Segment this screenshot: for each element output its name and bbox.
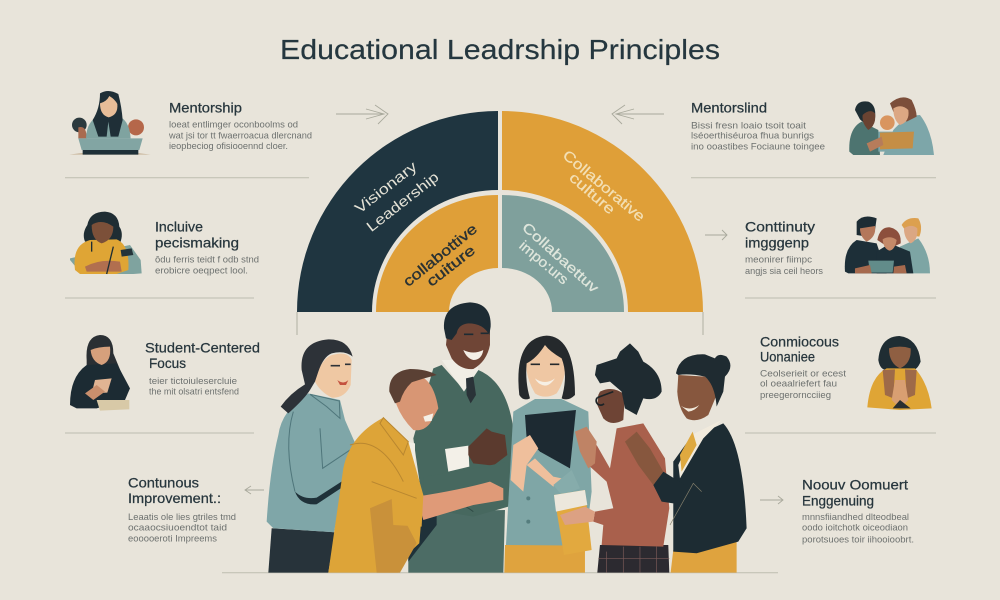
label: collaborative culture inner: collabottive — [401, 221, 481, 290]
text block: conmiocous: Uonaniee — [760, 349, 815, 365]
text block: engagement: mnnsfiiandhed dlteodbeal — [802, 512, 909, 523]
text block: inclusive decision making: Incluive — [155, 219, 203, 235]
text block: inclusive decision making: pecismaking — [155, 235, 239, 251]
figure: woman holding black folder — [504, 336, 592, 573]
figure: man in mustard shirt — [328, 369, 503, 573]
text block: mentorship left: loeat entlimger oconboolms od — [169, 120, 298, 130]
text block: mentorship right: Bissi fresn loaio tsoit toait — [691, 121, 806, 132]
text block: continuous improvement — [128, 475, 236, 545]
text block: conmiocous: Conmiocous — [760, 333, 839, 349]
text block: mentorship left — [168, 100, 312, 152]
arrow: continuity — [705, 230, 727, 240]
text block: continuous improvement: eooooeroti Impreems — [128, 534, 217, 545]
text block: mentorship left: Mentorship — [169, 100, 242, 116]
icon: woman in yellow shirt — [70, 212, 142, 274]
label: collaborative culture outer: Collaborative — [559, 148, 648, 225]
semicircle diagram — [297, 111, 703, 312]
text block: engagement: porotsuoes toir iihooioobrt. — [802, 535, 914, 546]
text block: student-centered focus: teier tictoiulesercluie — [149, 376, 237, 387]
text block: inclusive decision making — [155, 219, 259, 276]
text block: continuous improvement: Leaatis ole lies gtriles tmd — [128, 512, 236, 523]
text block: student-centered focus: the mit olsatri entsfend — [149, 387, 239, 398]
arrow: engagement — [760, 496, 783, 504]
label: collaborative culture inner: cuiture — [424, 243, 479, 290]
text block: continuous improvement: ocaaocsiuoendtot taid — [128, 523, 227, 534]
figure: woman in teal shirt — [267, 339, 357, 573]
figure: person in black jacket — [625, 354, 747, 573]
label: collaborative culture inner — [401, 221, 481, 290]
icon: student with notebook — [70, 335, 130, 411]
figure: tall man in green sweater — [408, 302, 513, 573]
title: Educational Leadrship Principles — [280, 34, 720, 65]
arrow: top left — [336, 105, 388, 124]
segment: collaborative culture inner — [376, 195, 498, 312]
text block: mentorship left: ieopbeciog ofisiooennd cloer. — [169, 141, 288, 152]
icon: group with book — [849, 97, 934, 155]
text block: inclusive decision making: erobicre oeqpect lool. — [155, 265, 248, 276]
text block: engagement: Noouv Oomuert — [802, 476, 908, 492]
text block: engagement: oodo ioitchotk oiceodiaon — [802, 523, 908, 534]
text block: engagement: Enggenuing — [802, 492, 874, 508]
label: visionary leadership: Leadership — [364, 169, 442, 236]
text block: continuity: Conttinuty — [745, 219, 815, 235]
text block: engagement — [802, 476, 914, 546]
text block: conmiocous: ol oeaalriefert fau — [760, 379, 837, 390]
icon: three people with tablet — [845, 216, 930, 273]
text block: continuity — [745, 219, 823, 277]
label: collaborative impact inner: Collabaettuv — [519, 219, 602, 296]
text block: mentorship right: Mentorslind — [691, 99, 767, 115]
arrow: continuous improvement — [245, 486, 264, 494]
segment: collaborative culture outer — [502, 111, 703, 312]
text block: student-centered focus — [145, 340, 260, 398]
label: visionary leadership: Visionary — [352, 158, 421, 217]
text block: continuity: angjs sia ceil heors — [745, 266, 823, 277]
text block: continuous improvement: Improvement.: — [128, 490, 221, 506]
text block: inclusive decision making: ôdu ferris teidt f odb stnd — [155, 255, 259, 266]
text block: conmiocous — [760, 333, 846, 401]
text block: student-centered focus: Student-Centered — [145, 340, 260, 356]
label: visionary leadership — [352, 158, 442, 236]
illustration: group of six educators — [267, 302, 747, 573]
text block: mentorship left: wat jsi tor tt fwaerroacua dlercnand — [168, 130, 312, 141]
text block: continuous improvement: Contunous — [128, 475, 199, 491]
label: collaborative impact inner — [516, 219, 602, 296]
text block: continuity: imgggenp — [745, 235, 809, 251]
arrow: top right — [612, 105, 664, 124]
icon: woman with clasped hands — [867, 336, 932, 410]
label: collaborative culture outer: culture — [566, 170, 618, 218]
label: collaborative impact inner: impo:urs — [516, 237, 572, 287]
text block: mentorship right: lséoerthiséuroa fhua bunrigs — [691, 130, 814, 142]
text block: continuity: meonirer fiimpc — [745, 255, 812, 266]
segment: collaborative impact inner — [502, 195, 624, 312]
figure: person in brown sweater — [560, 343, 669, 573]
text block: conmiocous: preegerorncciieg — [760, 390, 831, 401]
segment: visionary leadership — [297, 111, 498, 312]
text block: mentorship right — [691, 99, 825, 152]
text block: mentorship right: ino ooastibes Fociaune toingee — [691, 141, 825, 152]
text block: conmiocous: Ceolserieit or ecest — [760, 369, 846, 380]
text block: student-centered focus: Focus — [149, 355, 186, 371]
icon: teacher at laptop with students — [69, 91, 151, 155]
